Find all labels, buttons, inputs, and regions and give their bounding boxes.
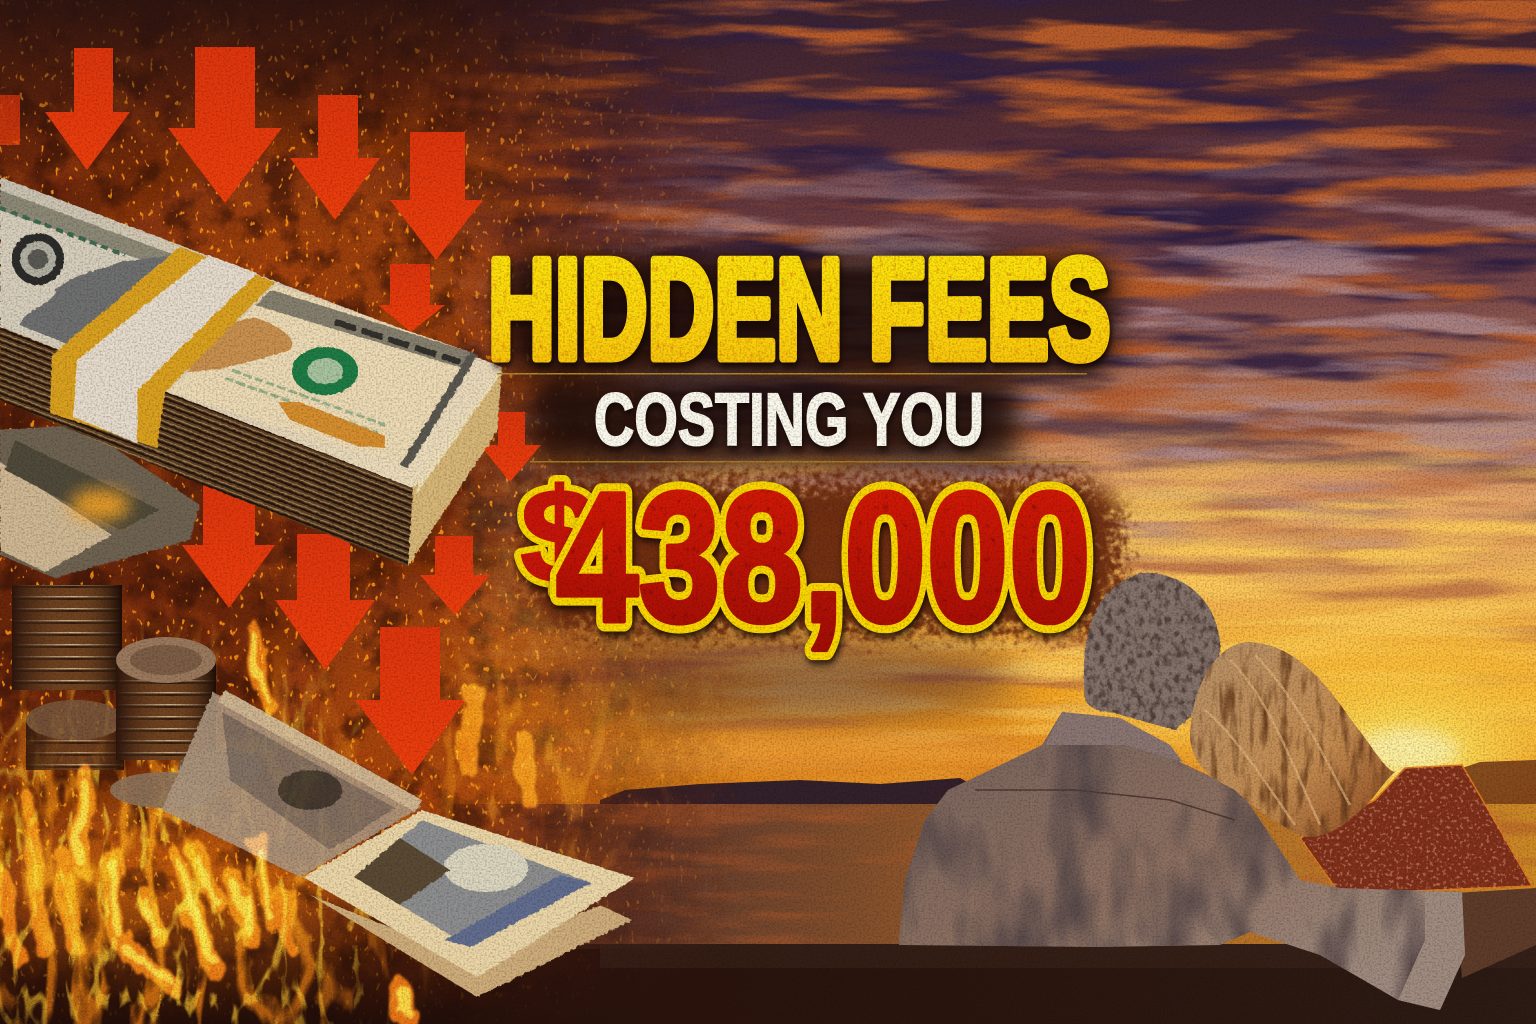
coin stack left	[12, 585, 122, 690]
HIDDEN FEES: HIDDEN FEES	[488, 230, 1110, 389]
headline	[488, 230, 1110, 661]
lake water	[0, 804, 1536, 949]
under bill	[310, 895, 632, 997]
man's head	[1084, 573, 1220, 730]
$438,000 amount fill: 438,000	[556, 454, 1091, 661]
lower left loose bills	[0, 425, 200, 578]
retired couple from behind	[899, 573, 1536, 1010]
dark bench rail	[360, 944, 1536, 1024]
serial dots	[0, 208, 125, 255]
$ sign fill: $	[520, 462, 598, 611]
arrow 1	[45, 48, 130, 170]
arrow 6	[480, 412, 541, 482]
$ sign outline: $	[520, 462, 598, 611]
stack side edges	[0, 327, 413, 566]
coin stack low	[26, 700, 124, 770]
bill centre panel	[354, 820, 591, 947]
sunset sky background	[430, 0, 1536, 804]
arrow 2	[168, 47, 282, 203]
100 outline	[335, 322, 460, 362]
distant tree line	[600, 760, 1536, 815]
bill inner panel left	[0, 190, 175, 345]
sleeve cuff	[1398, 892, 1465, 1010]
portrait tan	[188, 318, 293, 372]
dusky band over the lake	[520, 635, 1020, 725]
arrow 4	[390, 132, 483, 260]
flame tongues	[0, 625, 530, 1020]
arrow 3	[290, 95, 380, 220]
orange numerals	[278, 402, 385, 448]
woman's hair	[1190, 642, 1395, 837]
top bill	[303, 810, 635, 977]
bill inner panel right	[168, 285, 470, 465]
burning bill lower	[303, 810, 635, 997]
strapped money stack	[0, 177, 502, 566]
yellow cores	[81, 632, 408, 1016]
coin stack centre	[116, 637, 216, 760]
green lines	[225, 370, 385, 433]
burning rust backdrop on the left	[0, 0, 760, 1024]
fire veins backdrop	[0, 618, 669, 1024]
COSTING YOU: COSTING YOU	[594, 378, 984, 461]
headline separators	[497, 373, 1090, 462]
arrow 9	[420, 536, 490, 615]
arrow 8	[275, 534, 375, 670]
hair strands	[1205, 655, 1350, 825]
horizon orange band	[510, 732, 1070, 772]
man's shirt	[899, 712, 1465, 1010]
coin stacks	[12, 585, 262, 808]
red falling arrows	[0, 47, 541, 775]
portrait grey	[20, 256, 168, 345]
man's arm skin	[1455, 888, 1536, 978]
stack right edge	[408, 367, 502, 566]
strap yellow	[50, 247, 275, 448]
strap white	[73, 255, 257, 443]
amount outline: 438,000	[556, 454, 1091, 661]
arrow 10	[355, 627, 465, 775]
paper strap	[50, 247, 275, 448]
bill right fine border	[400, 352, 478, 468]
shirt collar	[1045, 712, 1183, 762]
arrow 5	[378, 264, 445, 332]
arrow 11	[0, 95, 20, 145]
dark panel behind headline	[505, 255, 1120, 630]
woman's red top	[1300, 765, 1532, 894]
bill top strip	[255, 290, 470, 368]
treasury seal	[292, 347, 358, 395]
arrow 7	[182, 485, 275, 608]
top bill face	[0, 177, 502, 488]
reserve seal	[12, 233, 64, 285]
sun glow	[1080, 625, 1536, 868]
burning bill upper	[162, 690, 422, 877]
orange bodies	[0, 625, 530, 1020]
loose coins	[110, 748, 262, 808]
shirt yoke seam	[975, 790, 1235, 820]
